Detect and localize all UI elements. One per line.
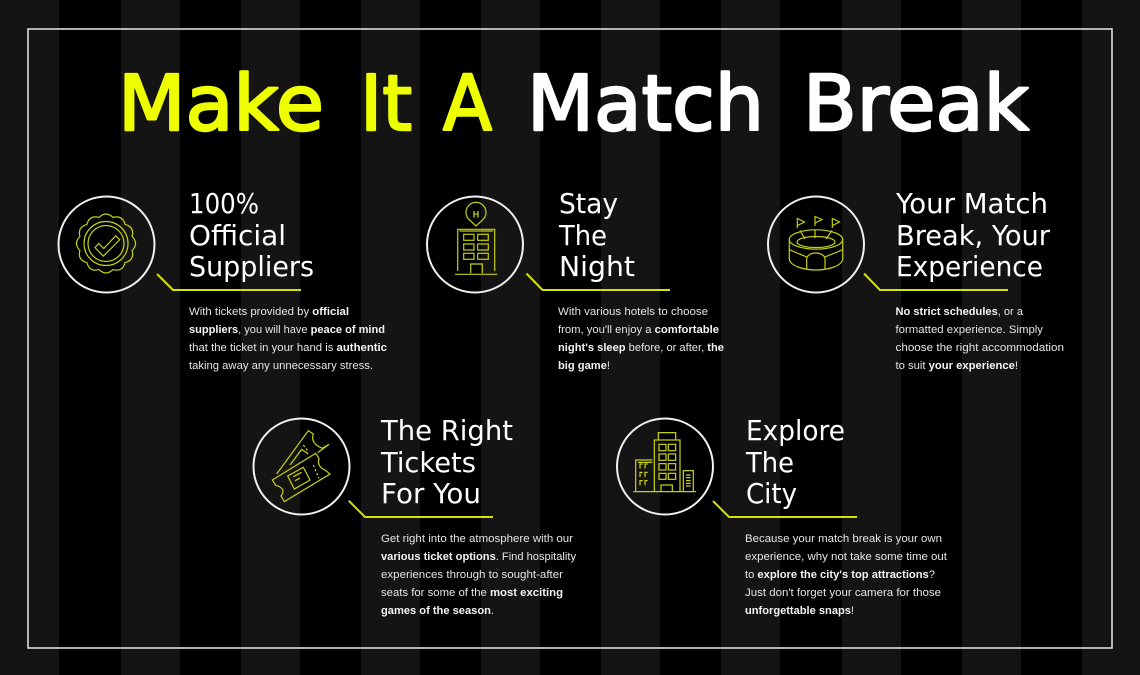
text block: With tickets provided by official xyxy=(189,306,349,318)
text block: suppliers, you will have peace of mind xyxy=(189,324,385,336)
heading xyxy=(558,187,635,283)
heading: Break, Your xyxy=(896,219,1050,252)
text block: big game! xyxy=(558,360,610,372)
title: It xyxy=(360,60,412,149)
text block: experience, why not take some time out xyxy=(745,551,947,563)
text block: Just don't forget your camera for those xyxy=(745,587,941,599)
heading: The xyxy=(745,446,794,479)
heading: City xyxy=(746,477,797,510)
heading: Explore xyxy=(746,414,845,447)
icon: tickets xyxy=(254,418,350,514)
text block: Because your match break is your own xyxy=(745,533,942,545)
text block: No strict schedules, or a xyxy=(896,306,1024,318)
icon: stadium with flags xyxy=(768,196,864,292)
text block: experiences through to sought-after xyxy=(381,569,563,581)
text block: that the ticket in your hand is authentic xyxy=(189,342,387,354)
text block: from, you'll enjoy a comfortable xyxy=(558,324,719,336)
heading: Tickets xyxy=(380,446,476,479)
panel: 100% official suppliers xyxy=(58,187,387,372)
arrow: connector line xyxy=(349,501,493,517)
arrow: connector line xyxy=(864,274,1008,290)
heading: Your Match xyxy=(895,187,1048,220)
text block: choose the right accommodation xyxy=(896,342,1064,354)
text block xyxy=(189,306,387,372)
title: Make xyxy=(118,60,324,149)
text block xyxy=(381,533,577,617)
text block xyxy=(896,306,1064,372)
panel: stay the night xyxy=(427,187,724,372)
heading xyxy=(895,187,1050,283)
text block: taking away any unnecessary stress. xyxy=(189,360,373,372)
heading: 100% xyxy=(189,187,259,220)
text block: night's sleep before, or after, the xyxy=(558,342,724,354)
icon: hotel with pin xyxy=(427,196,523,292)
text block: to explore the city's top attractions? xyxy=(745,569,935,581)
heading: For You xyxy=(381,477,481,510)
title: Match xyxy=(527,60,764,149)
arrow: connector line xyxy=(526,274,670,290)
icon: hotel with pin: H xyxy=(473,210,479,220)
text block: various ticket options. Find hospitality xyxy=(381,551,577,563)
heading: Suppliers xyxy=(189,250,314,283)
text block: With various hotels to choose xyxy=(558,306,708,318)
heading: The Right xyxy=(380,414,513,447)
heading: Experience xyxy=(896,250,1043,283)
text block: to suit your experience! xyxy=(896,360,1018,372)
text block xyxy=(558,306,724,372)
panel: explore the city xyxy=(617,414,947,617)
text block: games of the season. xyxy=(381,605,494,617)
icon: city buildings xyxy=(617,418,713,514)
text block xyxy=(745,533,947,617)
panel: the right tickets for you xyxy=(254,414,577,617)
title: A xyxy=(443,60,492,149)
text block: Get right into the atmosphere with our xyxy=(381,533,573,545)
arrow: connector line xyxy=(713,501,857,517)
text block: seats for some of the most exciting xyxy=(381,587,563,599)
panel: your match break, your experience xyxy=(768,187,1064,372)
arrow: connector line xyxy=(157,274,301,290)
title xyxy=(118,60,1029,149)
heading: Stay xyxy=(559,187,618,220)
icon: official badge with check mark xyxy=(58,196,154,292)
text block: formatted experience. Simply xyxy=(896,324,1044,336)
heading: Official xyxy=(189,219,286,252)
heading: Night xyxy=(559,250,635,283)
heading: The xyxy=(558,219,607,252)
title: Break xyxy=(803,60,1029,149)
heading xyxy=(745,414,845,510)
text block: unforgettable snaps! xyxy=(745,605,854,617)
heading xyxy=(380,414,513,510)
heading xyxy=(189,187,314,283)
